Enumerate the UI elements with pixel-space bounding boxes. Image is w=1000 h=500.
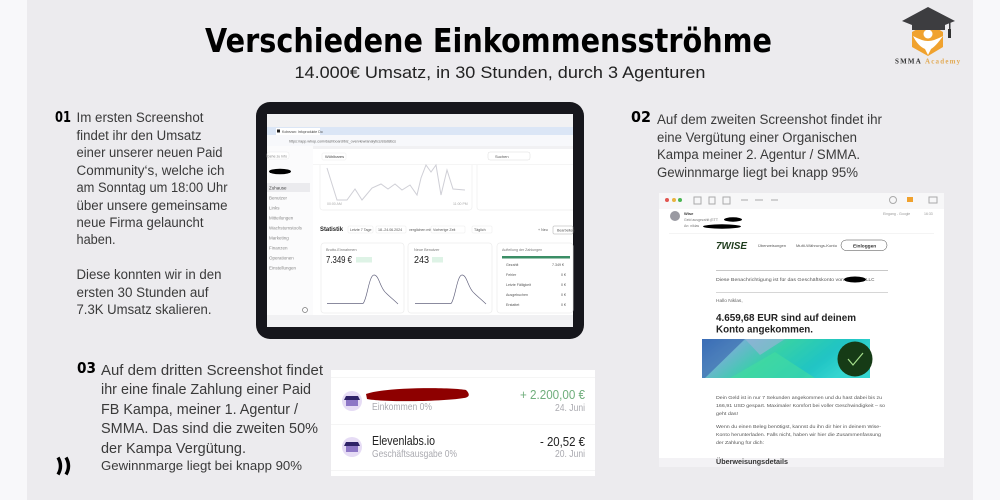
sidebar: Operationen [269, 256, 294, 260]
paragraph 01: Im ersten Screenshot [76, 110, 204, 125]
sidebar: Links [269, 206, 280, 210]
card: Aufteilung der Zahlungen: Fehler [506, 273, 517, 277]
top line chart: 11:00 PM [453, 202, 468, 206]
number 01: 01 [55, 108, 71, 126]
sidebar: Marketing [269, 236, 289, 240]
transaction: Elevenlabs.io: 20. Juni [555, 449, 585, 460]
paragraph 02: Kampa meiner 2. Agentur / SMMA. [657, 147, 860, 162]
tablet screenshot: Täglich [474, 228, 486, 232]
card: Brutto-Einnahmen: 7.349 € [326, 255, 352, 266]
email body text: Konto herunterladen. Falls nicht, haben wir hier die Zusammenfassung [716, 432, 881, 437]
card: Neue Benutzer [408, 243, 492, 313]
sidebar: Einstellungen [269, 266, 297, 270]
sender header: An: niklas [684, 224, 699, 228]
paragraph 01: Community‘s, welche ich [76, 163, 224, 178]
sidebar: Benutzer [269, 196, 288, 200]
tablet screenshot: 18.-24.06.2024 [378, 228, 402, 232]
email body text: der Zahlung für dich: [716, 440, 764, 445]
tablet screenshot: Letzte 7 Tage [350, 228, 372, 232]
paragraph 01: am Sonntag um 18:00 Uhr [76, 180, 228, 195]
sender header: 16:33 [924, 212, 933, 216]
paragraph 03: Gewinnmarge liegt bei knapp 90% [101, 458, 302, 473]
card: Aufteilung der Zahlungen [497, 243, 573, 313]
transaction: Elevenlabs.io [342, 434, 585, 460]
paragraph 01: ersten 30 Stunden auf [76, 285, 209, 300]
paragraph 01: über unsere gemeinsame [76, 198, 228, 213]
sidebar: Wachstumstools [269, 226, 303, 230]
transaction: income: 24. Juni [555, 403, 585, 414]
paragraph 03: der Kampa Vergütung. [101, 440, 246, 457]
wise nav: 7WISE [716, 241, 747, 252]
card: Aufteilung der Zahlungen: Aufteilung der Zahlungen [502, 248, 542, 252]
paragraph 03: ihr eine finale Zahlung einer Paid [101, 381, 311, 398]
email headline: 4.659,68 EUR sind auf deinem [716, 313, 856, 324]
email body text [716, 395, 885, 445]
email body text: 166,91 USD gespart. Maximaler Komfort bei voller Geschwindigkeit – so [716, 403, 885, 408]
card: Aufteilung der Zahlungen: 0 € [561, 303, 566, 307]
logo: SMMA Academy [895, 7, 961, 66]
email headline: Konto angekommen. [716, 324, 813, 336]
paragraph 02: Gewinnmarge liegt bei knapp 95% [657, 165, 858, 180]
icon: double chevron arrow [58, 458, 68, 474]
paragraph 01: Diese konnten wir in den [76, 267, 222, 282]
title: Verschiedene Einkommensströhme [205, 21, 772, 60]
paragraph 02: eine Vergütung einer Organischen [657, 130, 857, 145]
paragraph 03: Auf dem dritten Screenshot findet [101, 362, 324, 379]
paragraph 02: Auf dem zweiten Screenshot findet ihr [657, 112, 882, 127]
notification line: Hallo Niklas, [716, 298, 743, 304]
transaction: income [342, 388, 585, 414]
wise nav: Einloggen [853, 244, 876, 250]
card: Brutto-Einnahmen: Brutto-Einnahmen [326, 248, 357, 252]
Statistik toolbar: Statistik [320, 226, 343, 233]
sender header: Geld ausgezahlt (ETT [684, 218, 719, 222]
card: Aufteilung der Zahlungen: 0 € [561, 273, 566, 277]
logo wordmark: SMMA Academy [895, 58, 961, 66]
wise nav: Multi-Währungs-Konto [796, 243, 838, 248]
sidebar: Finanzen [269, 246, 288, 250]
paragraph 03: SMMA. Das sind die zweiten 50% [101, 420, 318, 437]
paragraph 01: haben. [76, 232, 116, 247]
tablet screenshot: verglichen mit [409, 228, 431, 232]
notification line: Diese Benachrichtigung ist für das Geschäftskonto von [716, 277, 845, 282]
card: Aufteilung der Zahlungen: Letzte Fälligkeit [506, 283, 531, 287]
section 03 text [77, 359, 324, 473]
tablet screenshot: Bearbeiten [557, 228, 574, 232]
transaction: Elevenlabs.io: Geschäftsausgabe 0% [372, 448, 457, 460]
paragraph 03: FB Kampa, meiner 1. Agentur / [101, 401, 299, 418]
number 02: 02 [631, 108, 651, 126]
window toolbar [659, 193, 944, 209]
section 02 text [631, 108, 882, 180]
paragraph 02 [657, 112, 882, 180]
section 01 text [55, 108, 228, 317]
sidebar: Gehe zu Info [267, 154, 287, 158]
transfer details heading: Überweisungsdetails [716, 457, 788, 466]
paragraph 01: neue Firma gelauncht [76, 215, 204, 230]
bank transactions screenshot [331, 370, 595, 476]
card: Aufteilung der Zahlungen: Erstattet [506, 303, 519, 307]
card: Brutto-Einnahmen [321, 243, 404, 313]
email body text: geht das! [716, 411, 738, 416]
card: Aufteilung der Zahlungen: Ausgebuchen [506, 293, 528, 297]
paragraph 01: 7.3K Umsatz skalieren. [76, 302, 212, 317]
top line chart: 00:00 AM [327, 202, 342, 206]
paragraph 03 [101, 362, 324, 473]
card: Neue Benutzer: Neue Benutzer [414, 248, 440, 252]
email screenshot [659, 193, 944, 467]
sender header [669, 211, 934, 234]
icon: graduation cap [902, 7, 955, 38]
card: Aufteilung der Zahlungen: 7.349 € [552, 263, 564, 267]
card: Neue Benutzer: 243 [414, 255, 429, 266]
transaction: Elevenlabs.io: Elevenlabs.io [372, 434, 435, 448]
sender header: Wise [684, 211, 694, 216]
card: Aufteilung der Zahlungen: 0 € [561, 293, 566, 297]
email body text: Dein Geld ist in nur 7 Sekunden angekommen und du hast dabei bis zu [716, 395, 882, 400]
transaction: Elevenlabs.io: - 20,52 € [540, 435, 585, 449]
tablet screenshot: https://app.whop.com/dashboard/biz_overview/analytics/statistics [289, 140, 396, 144]
email headline [716, 313, 856, 336]
email body text: Wenn du einen Beleg benötigst, kannst du ihn dir hier in deinem Wise- [716, 424, 881, 429]
wise nav: Überweisungen [758, 243, 786, 248]
tablet screenshot: Suchen [495, 154, 509, 159]
card: Aufteilung der Zahlungen: 0 € [561, 283, 566, 287]
paragraph 01: einer unserer neuen Paid [76, 145, 222, 160]
number 03: 03 [77, 359, 96, 377]
notification line [716, 270, 888, 304]
tablet screenshot: Wöhlbares [325, 154, 344, 159]
tablet screenshot [256, 102, 584, 339]
transaction: income: + 2.200,00 € [520, 388, 585, 402]
transaction: income: Einkommen 0% [372, 401, 432, 413]
tablet screen [267, 114, 573, 327]
top line chart [313, 164, 573, 210]
paragraph 01: findet ihr den Umsatz [76, 128, 202, 143]
sidebar: Mitteilungen [269, 216, 294, 220]
tablet frame [256, 102, 584, 339]
icon: orange badge [912, 23, 943, 56]
tablet screenshot: + Neu [538, 228, 548, 232]
tablet screenshot: Kohezan: Infoprodukte Do [282, 130, 323, 134]
sidebar [267, 146, 313, 315]
wise nav [716, 240, 887, 252]
tablet screenshot: Vorherige Zeit [433, 228, 455, 232]
sender header: Eingang - Google [883, 212, 910, 216]
wise banner [702, 339, 872, 378]
notification line: LLC [866, 277, 875, 282]
card: Aufteilung der Zahlungen: Gezahlt [506, 263, 518, 267]
sidebar: Zuhause [269, 186, 287, 190]
subtitle: 14.000€ Umsatz, in 30 Stunden, durch 3 Agenturen [294, 64, 706, 82]
transactions panel [331, 370, 595, 476]
dashboard main area [313, 149, 573, 315]
browser tab bar [267, 127, 573, 135]
email window [659, 193, 944, 462]
paragraph 01 [76, 110, 228, 317]
